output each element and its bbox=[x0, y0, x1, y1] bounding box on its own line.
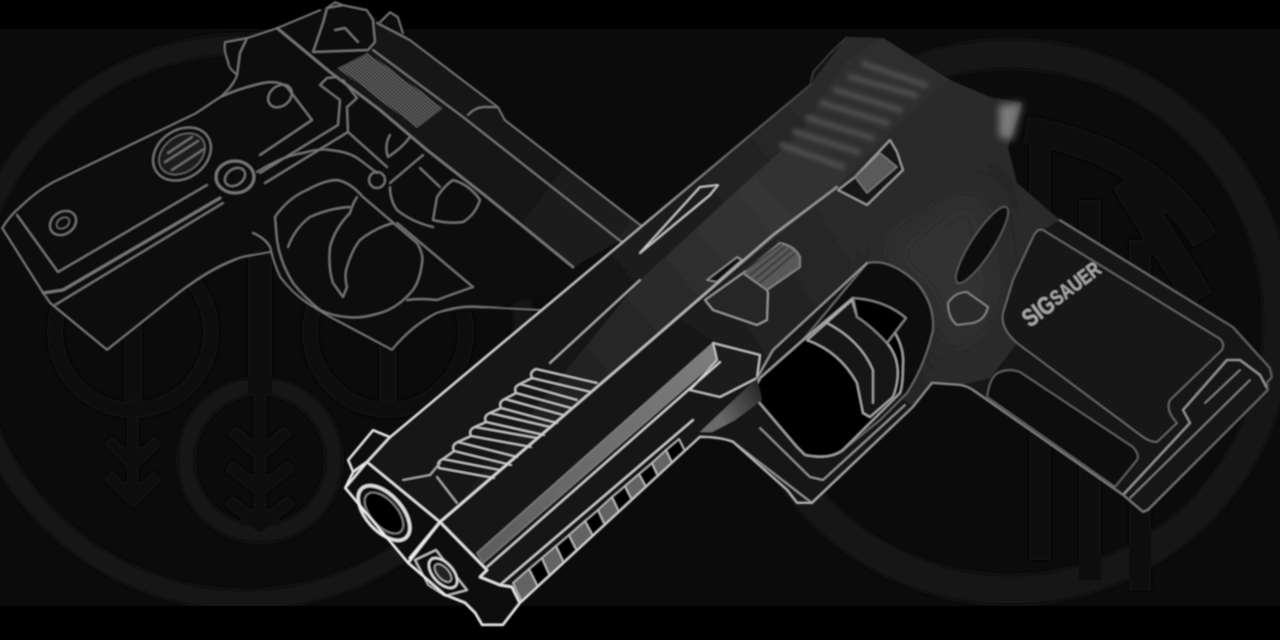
watermark: Beretta logo bbox=[0, 44, 523, 600]
Beretta grip panel bbox=[17, 185, 207, 272]
rear sight bbox=[810, 37, 860, 95]
Beretta outer outline bbox=[220, 10, 320, 97]
slide shading bbox=[450, 38, 950, 513]
slide parting line bbox=[410, 187, 837, 558]
SIG Sauer logo bbox=[1017, 255, 1107, 332]
pistol outline bbox=[345, 220, 1272, 625]
Beretta grip pins and screws bbox=[45, 80, 385, 240]
pistol silhouette bbox=[345, 37, 1272, 625]
Beretta slide serrations bbox=[338, 53, 443, 128]
Beretta safety lever bbox=[386, 135, 480, 227]
Beretta medallion bbox=[143, 117, 221, 191]
SIG Sauer logo: SIG bbox=[1017, 290, 1060, 332]
rear slide serrations bbox=[782, 64, 925, 167]
Beretta frame lines bbox=[257, 77, 423, 183]
frame rail lines bbox=[480, 362, 720, 585]
slide catch bbox=[838, 140, 903, 205]
Beretta hammer and rear sight bbox=[313, 2, 403, 52]
frame highlight bbox=[999, 103, 1022, 140]
frame soft light bbox=[880, 190, 1000, 350]
recess at dust cover bbox=[690, 343, 760, 397]
Beretta grip stripes bbox=[43, 198, 220, 293]
light rail bar bbox=[477, 343, 717, 563]
takedown lever bbox=[705, 243, 800, 325]
trigger guard opening bbox=[756, 298, 903, 457]
front slide serrations bbox=[438, 369, 597, 478]
trigger recess bbox=[780, 262, 933, 450]
Beretta main slide lines bbox=[277, 28, 573, 267]
slide detail lines bbox=[403, 280, 640, 503]
ejection line bbox=[640, 185, 718, 253]
frame top line bbox=[757, 263, 867, 378]
Beretta slide and barrel bbox=[330, 23, 643, 267]
illustration: Beretta pistol outline bbox=[2, 2, 643, 350]
top edge of slide bbox=[390, 85, 810, 437]
trigger bbox=[807, 298, 906, 417]
frame shading bbox=[680, 80, 1060, 407]
SIG Sauer logo: SAUER bbox=[1045, 257, 1106, 310]
illustration: SIG Sauer P320 pistol bbox=[345, 37, 1272, 625]
slide upper strip bbox=[367, 37, 950, 522]
Beretta trigger guard bbox=[275, 180, 422, 318]
watermark: SIG Sauer logo bbox=[742, 54, 1278, 590]
takedown vent slot bbox=[948, 201, 1016, 289]
Beretta trigger bbox=[288, 197, 393, 297]
accessory rail cells bbox=[513, 439, 685, 602]
front sight bbox=[348, 430, 390, 472]
grip panel bbox=[1003, 230, 1223, 442]
muzzle face bbox=[345, 462, 440, 563]
barrel bore bbox=[349, 476, 419, 550]
takedown button bbox=[948, 292, 988, 325]
lower grip panel bbox=[987, 370, 1138, 487]
trigger guard bottom bbox=[733, 405, 905, 503]
magazine base bbox=[1123, 360, 1268, 512]
lower front: guide rod bbox=[408, 522, 520, 625]
Beretta body silhouette bbox=[2, 2, 643, 350]
frame flare highlight bbox=[700, 378, 762, 432]
